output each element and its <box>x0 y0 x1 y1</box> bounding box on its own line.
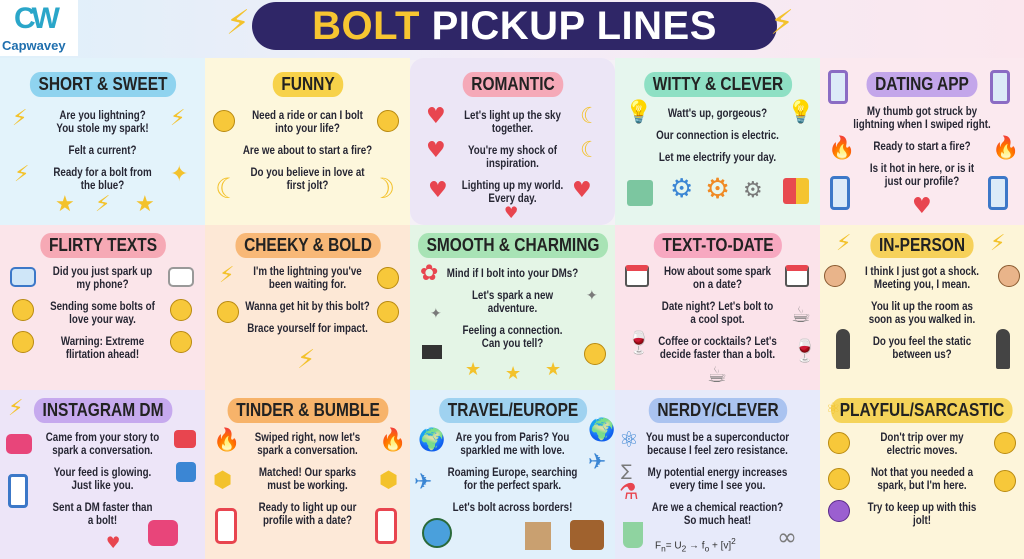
panel: romantic: together. <box>492 123 533 135</box>
panel: nerdy/clever: Are we a chemical reaction? <box>652 502 783 514</box>
panel: short & sweet: Felt a current? <box>69 145 136 157</box>
panel: witty & clever: ⚙ <box>743 178 763 203</box>
panel: instagram dm: INSTAGRAM DM <box>42 400 163 420</box>
panel: funny: ☾ <box>215 172 240 205</box>
panel: romantic: ♥ <box>504 203 518 222</box>
logo <box>0 0 78 56</box>
panel: witty & clever: Our connection is electric. <box>656 130 779 142</box>
panel: smooth & charming: ✦ <box>430 306 442 322</box>
panel: smooth & charming: ★ <box>545 359 561 380</box>
panel: instagram dm: a bolt! <box>88 515 117 527</box>
panel: short & sweet: You stole my spark! <box>56 123 149 135</box>
panel: text-to-date: ☕ <box>707 363 727 388</box>
panel: witty & clever: 💡 <box>787 100 814 125</box>
panel: text-to-date: TEXT-TO-DATE <box>662 235 773 255</box>
panel: travel/europe: ✈ <box>588 450 606 475</box>
panel: instagram dm: ⚡ <box>8 396 23 421</box>
panel: instagram dm: Just like you. <box>72 480 133 492</box>
panel: flirty texts: Sending some bolts of <box>50 301 155 313</box>
panel: romantic: inspiration. <box>486 158 539 170</box>
panel: romantic: ♥ <box>426 138 446 163</box>
panel: nerdy/clever: NERDY/CLEVER <box>657 400 778 420</box>
panel: in-person: ⚡ <box>836 231 851 256</box>
panel: smooth & charming: ✦ <box>586 288 598 304</box>
panel: short & sweet: the blue? <box>81 180 124 192</box>
panel: in-person: You lit up the room as <box>871 301 973 313</box>
panel: travel/europe: TRAVEL/EUROPE <box>447 400 578 420</box>
panel: text-to-date: Date night? Let's bolt to <box>662 301 773 313</box>
panel: short & sweet: ✦ <box>170 162 188 187</box>
panel: short & sweet: Are you lightning? <box>59 110 146 122</box>
panel: playful/sarcastic: jolt! <box>913 515 931 527</box>
panel: short & sweet: SHORT & SWEET <box>38 74 167 94</box>
panel: witty & clever: WITTY & CLEVER <box>652 74 783 94</box>
panel: cheeky & bold: CHEEKY & BOLD <box>244 235 371 255</box>
panel: flirty texts: FLIRTY TEXTS <box>48 235 157 255</box>
panel: short & sweet <box>0 58 205 225</box>
panel: cheeky & bold: Wanna get hit by this bolt? <box>245 301 370 313</box>
panel: funny: Need a ride or can I bolt <box>252 110 363 122</box>
panel: travel/europe <box>410 390 615 559</box>
panel: short & sweet: ⚡ <box>95 192 110 217</box>
panel: text-to-date: 🍷 <box>625 331 652 356</box>
panel: tinder & bumble: Ready to light up our <box>259 502 356 514</box>
panel: funny: into your life? <box>275 123 340 135</box>
panel: instagram dm: Came from your story to <box>46 432 159 444</box>
panel: nerdy/clever: every time I see you. <box>670 480 765 492</box>
panel: nerdy/clever: ⚛ <box>619 428 639 453</box>
top decorative background <box>0 0 1024 60</box>
panel: cheeky & bold: ⚡ <box>219 263 234 288</box>
panel: text-to-date: Coffee or cocktails? Let's <box>658 336 777 348</box>
panel: nerdy/clever <box>615 390 820 559</box>
panel: short & sweet: Ready for a bolt from <box>53 167 152 179</box>
panel: playful/sarcastic: Not that you needed a <box>871 467 973 479</box>
title banner: BOLT PICKUP LINES <box>312 4 717 48</box>
panel: playful/sarcastic: ⚛ <box>826 399 840 418</box>
panel: travel/europe: 🌍 <box>418 428 445 453</box>
panel: in-person: ⚡ <box>990 231 1005 256</box>
panel: travel/europe: for the perfect spark. <box>464 480 561 492</box>
panel: flirty texts: flirtation ahead! <box>66 349 139 361</box>
panel: tinder & bumble: profile with a date? <box>263 515 352 527</box>
panel: smooth & charming: ✿ <box>420 261 438 286</box>
panel: smooth & charming <box>410 225 615 390</box>
panel: romantic: ♥ <box>572 178 592 203</box>
panel: tinder & bumble: 🔥 <box>379 428 406 453</box>
panel: in-person <box>820 225 1024 390</box>
panel: flirty texts: my phone? <box>76 279 129 291</box>
panel: dating app: Is it hot in here, or is it <box>870 163 974 175</box>
panel: funny: ☽ <box>370 172 395 205</box>
panel: dating app: ♥ <box>912 194 932 219</box>
panel: funny: Are we about to start a fire? <box>243 145 372 157</box>
panel: flirty texts: Did you just spark up <box>53 266 152 278</box>
panel: playful/sarcastic: Don't trip over my <box>880 432 964 444</box>
panel: nerdy/clever: You must be a superconductor <box>646 432 789 444</box>
panel: text-to-date: decide faster than a bolt. <box>660 349 775 361</box>
text: ⚡ <box>770 3 794 43</box>
panel: travel/europe: Are you from Paris? You <box>456 432 569 444</box>
panel: funny: FUNNY <box>281 74 334 94</box>
panel: short & sweet: ⚡ <box>14 162 29 187</box>
panel: dating app: Ready to start a fire? <box>873 141 971 153</box>
panel: text-to-date: a cool spot. <box>690 314 745 326</box>
panel: instagram dm: ♥ <box>106 533 120 552</box>
panel: in-person: between us? <box>892 349 952 361</box>
panel: romantic <box>410 58 615 225</box>
panel: dating app <box>820 58 1024 225</box>
panel: tinder & bumble: 🔥 <box>213 428 240 453</box>
panel: smooth & charming: adventure. <box>488 303 537 315</box>
panel: witty & clever: Watt's up, gorgeous? <box>668 108 767 120</box>
panel: in-person: I think I just got a shock. <box>865 266 979 278</box>
panel: instagram dm <box>0 390 205 559</box>
panel: cheeky & bold: Brace yourself for impact. <box>247 323 368 335</box>
panel: nerdy/clever: ⚗ <box>619 480 639 505</box>
panel: short & sweet: ★ <box>55 192 75 217</box>
panel: romantic: ♥ <box>426 104 446 129</box>
panel: romantic: Lighting up my world. <box>462 180 563 192</box>
panel: in-person: IN-PERSON <box>879 235 965 255</box>
panel: dating app: 🔥 <box>992 136 1019 161</box>
panel: text-to-date: How about some spark <box>664 266 771 278</box>
panel: travel/europe: sparkled me with love. <box>460 445 565 457</box>
panel: romantic: Let's light up the sky <box>464 110 561 122</box>
panel: smooth & charming: Feeling a connection. <box>463 325 562 337</box>
panel: tinder & bumble: Swiped right, now let's <box>255 432 360 444</box>
panel: romantic: ☾ <box>580 138 600 163</box>
panel: tinder & bumble: ⬢ <box>213 468 232 493</box>
panel: playful/sarcastic: PLAYFUL/SARCASTIC <box>840 400 1004 420</box>
panel: nerdy/clever: So much heat! <box>684 515 751 527</box>
panel: in-person: soon as you walked in. <box>869 314 975 326</box>
panel: dating app: just our profile? <box>885 176 959 188</box>
panel: dating app: lightning when I swiped right. <box>853 119 991 131</box>
panel: flirty texts <box>0 225 205 390</box>
panel: witty & clever: 💡 <box>625 100 652 125</box>
panel: tinder & bumble: TINDER & BUMBLE <box>236 400 379 420</box>
panel: romantic: Every day. <box>488 193 537 205</box>
panel: cheeky & bold <box>205 225 410 390</box>
panel: short & sweet: ⚡ <box>170 106 185 131</box>
panel: tinder & bumble <box>205 390 410 559</box>
panel: instagram dm: spark a conversation. <box>52 445 153 457</box>
panel: nerdy/clever: because I feel zero resistance. <box>647 445 788 457</box>
panel: playful/sarcastic: electric moves. <box>887 445 957 457</box>
panel: in-person: Meeting you, I mean. <box>874 279 970 291</box>
panel: cheeky & bold: ⚡ <box>297 345 315 375</box>
panel: short & sweet: ★ <box>135 192 155 217</box>
panel: nerdy/clever: Fn= U2 → fo + [v]2 <box>655 536 736 553</box>
panel: smooth & charming: Let's spark a new <box>472 290 553 302</box>
panel: dating app: 🔥 <box>828 136 855 161</box>
panel: funny: Do you believe in love at <box>250 167 365 179</box>
panel: travel/europe: Let's bolt across borders! <box>453 502 572 514</box>
panel: romantic: ROMANTIC <box>471 74 554 94</box>
panel: witty & clever: ⚙ <box>670 174 693 204</box>
panel: nerdy/clever: ∑ <box>621 461 632 480</box>
panel: smooth & charming: ★ <box>505 363 521 384</box>
panel: funny: first jolt? <box>287 180 328 192</box>
panel: nerdy/clever: My potential energy increases <box>648 467 787 479</box>
panel: smooth & charming: SMOOTH & CHARMING <box>426 235 599 255</box>
panel: instagram dm: Your feed is glowing. <box>54 467 151 479</box>
panel: tinder & bumble: must be working. <box>267 480 348 492</box>
panel: smooth & charming: Can you tell? <box>482 338 543 350</box>
panel: dating app: My thumb got struck by <box>867 106 977 118</box>
panel: cheeky & bold: been waiting for. <box>269 279 346 291</box>
panel: text-to-date: on a date? <box>693 279 742 291</box>
panel: instagram dm: Sent a DM faster than <box>53 502 152 514</box>
panel: travel/europe: Roaming Europe, searching <box>448 467 577 479</box>
panel: short & sweet: ⚡ <box>12 106 27 131</box>
panel: witty & clever: ⚙ <box>705 172 730 205</box>
panel: tinder & bumble: spark a conversation. <box>257 445 358 457</box>
panel: text-to-date: ☕ <box>791 303 811 328</box>
panel: nerdy/clever: ∞ <box>777 523 797 551</box>
panel: text-to-date: 🍷 <box>791 339 818 364</box>
panel: flirty texts: love your way. <box>69 314 136 326</box>
panel: witty & clever: Let me electrify your day. <box>659 152 776 164</box>
panel: dating app: DATING APP <box>875 74 969 94</box>
panel: tinder & bumble: Matched! Our sparks <box>259 467 356 479</box>
panel: smooth & charming: ★ <box>465 359 481 380</box>
logo: Capwavey <box>2 38 66 53</box>
panel: tinder & bumble: ⬢ <box>379 468 398 493</box>
panel: funny <box>205 58 410 225</box>
panel: witty & clever <box>615 58 820 225</box>
panel: flirty texts: Warning: Extreme <box>61 336 144 348</box>
panel: travel/europe: 🌍 <box>588 418 615 443</box>
panel: cheeky & bold: I'm the lightning you've <box>253 266 362 278</box>
panel: romantic: ☾ <box>580 104 600 129</box>
panel: playful/sarcastic: Try to keep up with this <box>868 502 976 514</box>
logo: CW <box>14 2 56 35</box>
panel: travel/europe: ✈ <box>414 470 432 495</box>
panel: romantic: You're my shock of <box>468 145 557 157</box>
panel: text-to-date <box>615 225 820 390</box>
panel: in-person: Do you feel the static <box>873 336 971 348</box>
panel: smooth & charming: Mind if I bolt into your DMs? <box>447 268 578 280</box>
icon: title bolts: ⚡ <box>226 3 250 43</box>
panel: romantic: ♥ <box>428 178 448 203</box>
panel: playful/sarcastic <box>820 390 1024 559</box>
panel: playful/sarcastic: spark, but I'm here. <box>877 480 967 492</box>
